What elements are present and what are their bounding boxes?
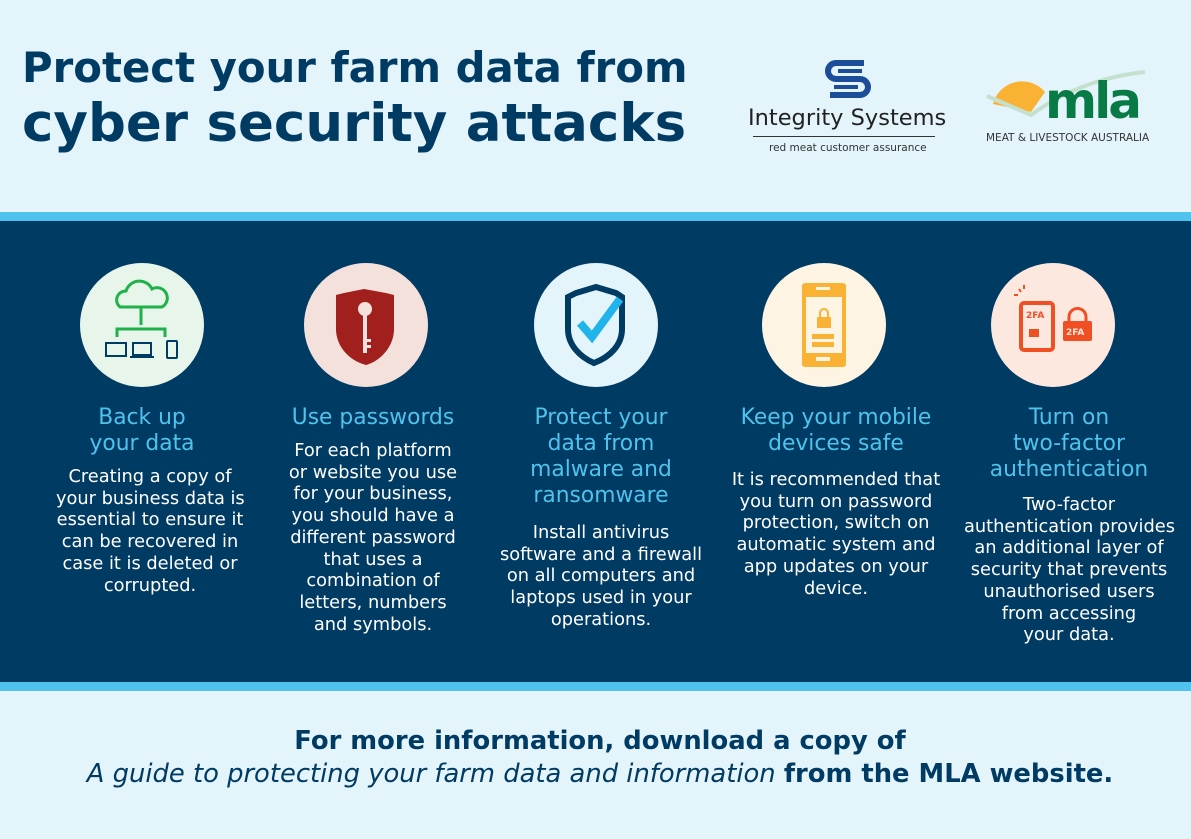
column: malware: software and a firewall [500,544,702,565]
column: malware: data from [548,431,654,456]
column: mobile: app updates on your [744,556,928,577]
column: back up [56,405,245,596]
column: malware: on all computers and [507,565,695,586]
logo: Integrity Systems [748,60,946,154]
logo: Integrity Systems: red meat customer assurance [769,142,927,154]
column: mobile: protection, switch on [743,512,929,533]
footer text: A guide to protecting your farm data and information from the MLA website. [87,759,1113,789]
title [22,43,688,154]
column: 2FA: security that prevents [971,559,1167,580]
panel: tips [0,221,1191,682]
logo: Integrity Systems: Integrity Systems [748,105,946,131]
column: passwords: and symbols. [314,614,432,635]
logo: MLA: MEAT & LIVESTOCK AUSTRALIA [986,132,1149,144]
column: passwords: or website you use [289,462,457,483]
icon: mobile phone [762,263,886,387]
column: malware: Install antivirus [533,522,669,543]
column: 2FA [964,405,1175,645]
column: mobile [732,405,940,599]
icon: 2FA: 2FA [1066,328,1084,338]
column: passwords: combination of [306,570,440,591]
column: 2FA: authentication [990,457,1148,482]
column: malware: malware and [530,457,672,482]
column: mobile: automatic system and [737,534,935,555]
icon: 2FA: 2FA [1026,311,1044,321]
column: malware [500,405,702,630]
icon: 2FA [991,263,1115,387]
column: mobile: device. [804,578,868,599]
column: 2FA: Two-factor [1023,494,1115,515]
column: passwords: you should have a [291,505,455,526]
column: back up: corrupted. [104,575,196,596]
column: 2FA: authentication provides [964,516,1175,537]
column: passwords: different password [290,527,456,548]
icon: cloud backup [80,263,204,387]
column: mobile: It is recommended that [732,469,940,490]
stripe [0,212,1191,691]
column: 2FA: an additional layer of [974,537,1164,558]
column: back up: can be recovered in [62,531,238,552]
column: passwords: for your business, [294,483,452,504]
footer text: For more information, download a copy of [294,726,906,756]
column: malware: laptops used in your [510,587,692,608]
column: malware: ransomware [533,483,669,508]
column: back up: your business data is [56,488,245,509]
column: 2FA: your data. [1023,624,1115,645]
column: mobile: you turn on password [740,491,932,512]
column: mobile: devices safe [768,431,904,456]
title: Protect your farm data from [22,43,688,92]
title: cyber security attacks [22,93,686,154]
column: passwords [289,405,457,635]
icon: shield key [304,263,428,387]
column: 2FA: unauthorised users [983,581,1155,602]
logo: MLA [986,70,1150,144]
column: malware: Protect your [534,405,668,430]
column: 2FA: from accessing [1002,603,1136,624]
column: back up: Back up [98,405,186,430]
column: back up: Creating a copy of [68,466,232,487]
column: passwords: letters, numbers [299,592,447,613]
column: passwords: that uses a [323,549,423,570]
column: malware: operations. [551,609,651,630]
column: mobile: Keep your mobile [741,405,931,430]
icon: shield check [534,263,658,387]
column: back up: case it is deleted or [62,553,238,574]
column: 2FA: two-factor [1013,431,1125,456]
column: 2FA: Turn on [1029,405,1109,430]
footer text [85,726,1113,789]
column: passwords: For each platform [294,440,452,461]
logo: MLA: mla [1045,72,1139,130]
column: back up: essential to ensure it [57,509,243,530]
column: passwords: Use passwords [292,405,454,430]
column: back up: your data [89,431,195,456]
